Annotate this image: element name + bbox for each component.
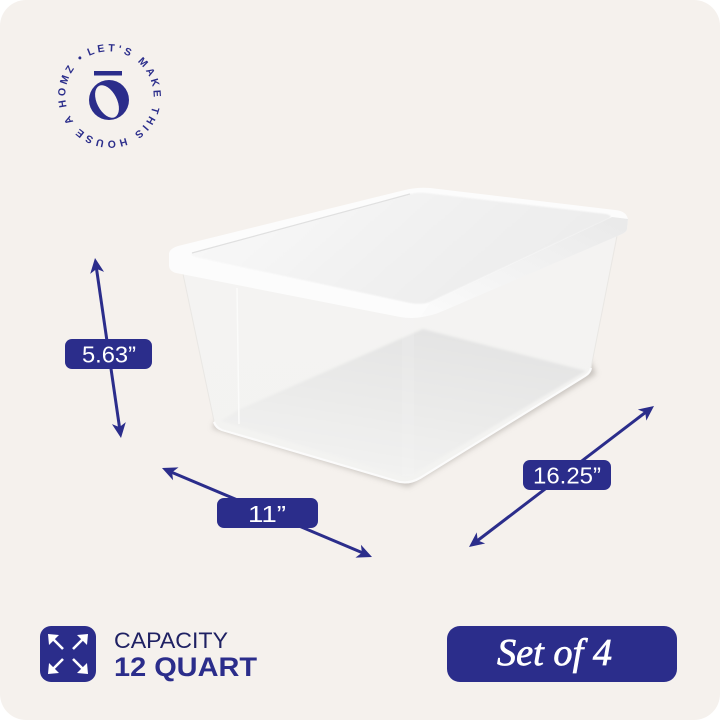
arrow head bottom left bbox=[465, 532, 485, 553]
box front corner highlight bbox=[402, 317, 414, 476]
arrow head right bbox=[355, 545, 375, 563]
arrow head top bbox=[88, 257, 104, 274]
set of 4 badge bbox=[447, 626, 677, 682]
height label bbox=[65, 339, 152, 369]
box side edges bbox=[183, 236, 617, 421]
storage box bbox=[169, 188, 628, 487]
lid top surface bbox=[191, 193, 611, 304]
lid outer rim bbox=[169, 188, 628, 318]
icon: capacity expand arrows bbox=[40, 626, 96, 682]
length label bbox=[523, 460, 611, 490]
capacity value: 12 QUART bbox=[114, 652, 258, 682]
box lid bbox=[169, 188, 628, 318]
height dimension arrow bbox=[65, 257, 152, 439]
box bottom edge bbox=[214, 368, 591, 482]
arrow shaft bbox=[171, 472, 363, 553]
circular slogan text: LET'S MAKE THIS HOUSE A HOMZ • bbox=[58, 44, 161, 148]
capacity text bbox=[114, 628, 258, 682]
arrow head left bbox=[159, 462, 179, 480]
box shadow bbox=[212, 360, 596, 487]
arrow head top right bbox=[638, 400, 658, 421]
length dimension arrow bbox=[465, 400, 658, 553]
logo mark bar bbox=[94, 71, 122, 76]
capacity heading: CAPACITY bbox=[114, 628, 228, 653]
arrow shaft bbox=[477, 412, 646, 541]
set of 4 badge: Set of 4 bbox=[497, 632, 612, 674]
width dimension arrow bbox=[159, 462, 375, 563]
lid groove bbox=[192, 194, 410, 253]
width label: 11” bbox=[248, 501, 286, 527]
logo badge bbox=[58, 44, 161, 148]
lid right band bbox=[420, 217, 628, 317]
arrow head bottom bbox=[112, 422, 128, 439]
height label: 5.63” bbox=[82, 342, 136, 368]
length label: 16.25” bbox=[533, 462, 601, 488]
box body bbox=[183, 232, 617, 482]
box floor bbox=[221, 329, 586, 477]
arrow shaft bbox=[96, 268, 120, 428]
width label bbox=[217, 498, 318, 528]
logo mark ring bbox=[89, 80, 129, 122]
box left corner seam bbox=[237, 288, 239, 424]
